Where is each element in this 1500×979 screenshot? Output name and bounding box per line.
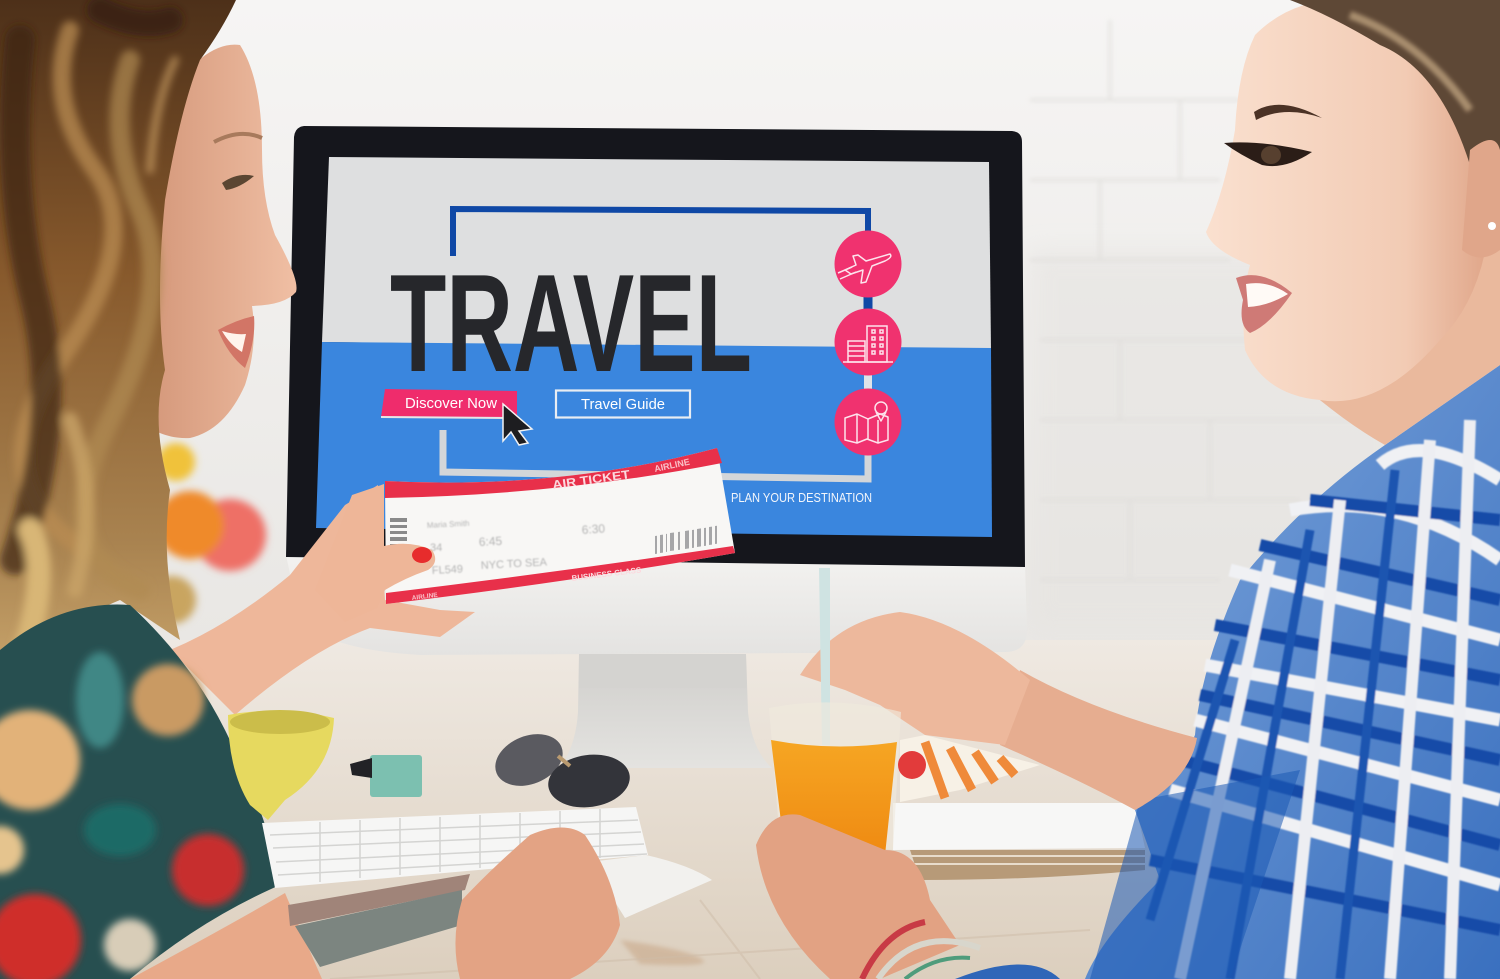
- flowers: [148, 443, 266, 624]
- arm: right woman: [1000, 670, 1197, 810]
- yellow bowl: [228, 710, 334, 820]
- face: left woman: [120, 45, 297, 438]
- neck: right woman: [1285, 240, 1500, 445]
- screen frame lines: [443, 209, 868, 479]
- floral shirt: [0, 605, 280, 979]
- button: Discover Now: [381, 389, 517, 418]
- button: Travel Guide: [556, 390, 690, 418]
- icon: cursor: [503, 404, 532, 445]
- screen upper: [322, 157, 991, 350]
- heading: TRAVEL: TRAVEL: [390, 246, 752, 401]
- left woman: [0, 0, 475, 979]
- screen lower: [316, 342, 992, 537]
- right woman's lower hand and bracelets: [756, 814, 1060, 979]
- monitor chin: [286, 555, 1027, 655]
- upper arm: left woman: [130, 893, 322, 979]
- right woman: [800, 0, 1500, 979]
- button: Travel Guide: Travel Guide: [581, 397, 665, 413]
- plaid shirt: [1085, 365, 1500, 979]
- icon: airplane: [834, 230, 902, 298]
- straw: [819, 568, 830, 745]
- ticket details: [427, 519, 606, 577]
- ticket details: Maria Smith: [427, 519, 470, 530]
- air ticket: [385, 448, 735, 604]
- ticket details: 6:30: [581, 521, 606, 537]
- wooden table: [0, 640, 1500, 979]
- monitor bezel: [286, 126, 1025, 567]
- orange striped cloth: [898, 735, 1040, 802]
- notebooks: [893, 803, 1145, 880]
- hair: left woman: [0, 0, 236, 680]
- icon: map with pin: [834, 388, 902, 456]
- caption: PLAN YOUR DESTINATION: PLAN YOUR DESTINATION: [731, 491, 872, 505]
- hand holding ticket: [315, 484, 435, 622]
- hair: right woman: [1290, 0, 1500, 190]
- ticket details: 34: [430, 542, 442, 554]
- mouth: right woman: [1236, 275, 1292, 333]
- arm: left woman: [170, 485, 475, 715]
- ticket bottom band: [386, 546, 735, 604]
- nail polish bottle: [350, 755, 422, 797]
- monitor: [286, 126, 1027, 768]
- left woman's hand on mouse: [455, 828, 620, 979]
- button: Discover Now: Discover Now: [405, 396, 498, 412]
- sunglasses: [488, 725, 633, 812]
- ear: right woman: [1462, 140, 1500, 258]
- mouse and magazines: [288, 855, 712, 967]
- monitor stand: [560, 654, 772, 768]
- ticket details: FL549: [432, 563, 463, 577]
- ticket top band: [385, 448, 722, 498]
- ticket barcodes: [390, 518, 407, 549]
- keyboard: [262, 807, 648, 888]
- eye and brow: right woman: [1254, 105, 1322, 120]
- ticket details: NYC TO SEA: [481, 557, 548, 572]
- brick wall background: [0, 0, 1500, 640]
- air ticket: AIRLINE: [411, 592, 439, 602]
- air ticket: BUSINESS CLASS: [571, 565, 642, 583]
- face: right woman: [1206, 0, 1491, 401]
- air ticket: AIRLINE: [653, 457, 691, 474]
- ticket details: 6:45: [478, 534, 503, 549]
- icon: buildings: [834, 308, 902, 376]
- glass of juice: [769, 568, 901, 855]
- hand holding straw: [800, 612, 1030, 745]
- air ticket: AIR TICKET: [551, 467, 631, 492]
